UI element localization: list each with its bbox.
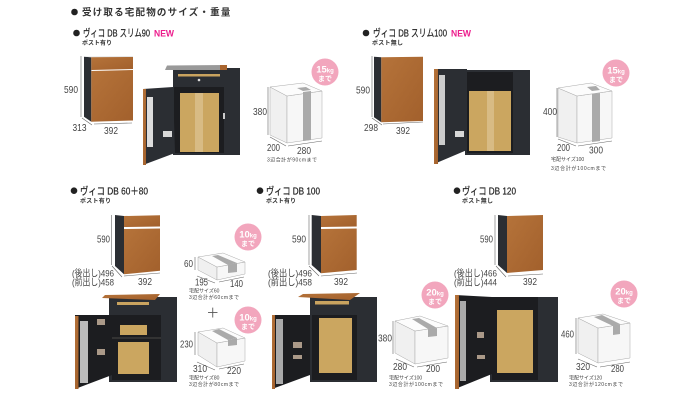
parcel box bbox=[253, 83, 322, 164]
model title: ヴィコ DB 100 bbox=[266, 184, 320, 198]
parcel box: 宅配サイズ100 bbox=[389, 374, 422, 382]
mailbox dimensions bbox=[454, 215, 543, 289]
mailbox dimensions: (後出し)496 bbox=[268, 268, 312, 280]
weight badge bbox=[234, 306, 262, 334]
closed mailbox bbox=[84, 56, 133, 122]
mailbox dimensions: 590 bbox=[64, 84, 78, 96]
parcel box: size 60: 195 bbox=[195, 276, 208, 288]
model title: NEW bbox=[154, 28, 174, 38]
weight badge: 20kg bbox=[426, 288, 444, 298]
mailbox dimensions: (後出し)466 bbox=[454, 268, 497, 280]
weight badge bbox=[610, 280, 638, 308]
weight badge: 10kg bbox=[239, 312, 257, 324]
mailbox dimensions: 590 bbox=[97, 234, 110, 246]
mailbox dimensions: 313 bbox=[72, 122, 87, 134]
weight badge: まで bbox=[318, 75, 332, 83]
model title: NEW bbox=[451, 28, 471, 38]
mailbox dimensions: (後出し)496 bbox=[72, 268, 114, 280]
model title: ポスト有り bbox=[82, 39, 112, 47]
parcel box: 320 bbox=[576, 361, 590, 373]
parcel box: 400 bbox=[543, 106, 557, 118]
weight badge bbox=[312, 58, 338, 86]
weight badge: まで bbox=[241, 240, 255, 248]
closed mailbox bbox=[312, 215, 357, 273]
model title: ヴィコ DB スリム90 bbox=[83, 26, 150, 40]
parcel box: size 60: 3辺合計が60cmまで bbox=[189, 294, 239, 301]
parcel box: 300 bbox=[589, 144, 603, 156]
parcel box: 280 bbox=[297, 145, 311, 157]
mailbox dimensions: 392 bbox=[138, 276, 152, 288]
parcel box: 280 bbox=[611, 363, 624, 375]
weight badge bbox=[234, 224, 262, 250]
parcel box: 3辺合計が100cmまで bbox=[389, 381, 443, 388]
model title: ポスト有り bbox=[80, 197, 111, 205]
parcel box: size 80: 宅配サイズ80 bbox=[189, 374, 220, 382]
open mailbox bbox=[272, 293, 377, 389]
mailbox dimensions: 590 bbox=[292, 234, 306, 246]
weight badge: 15kg bbox=[607, 66, 625, 76]
parcel box: 3辺合計が90cmまで bbox=[267, 156, 317, 164]
open mailbox bbox=[143, 65, 240, 165]
parcel box: 380 bbox=[378, 332, 392, 344]
panel: DB 60+80 bbox=[71, 184, 262, 389]
parcel box: 3辺合計が100cmまで bbox=[551, 165, 606, 172]
model title: ポスト無し bbox=[462, 197, 493, 205]
parcel box: 3辺合計が120cmまで bbox=[569, 381, 623, 388]
heading: 受け取る宅配物のサイズ・重量 bbox=[82, 6, 232, 18]
parcel box: size 80 bbox=[180, 328, 245, 388]
weight badge: 10kg bbox=[239, 230, 257, 240]
mailbox dimensions: 298 bbox=[364, 122, 378, 134]
parcel box: size 60: 140 bbox=[230, 278, 243, 290]
model title bbox=[71, 184, 148, 205]
mailbox dimensions: (前出し)458 bbox=[72, 277, 114, 289]
mailbox dimensions: 590 bbox=[480, 234, 493, 246]
parcel box: 380 bbox=[253, 106, 267, 118]
parcel box bbox=[543, 83, 612, 172]
parcel box: size 60 bbox=[184, 253, 245, 301]
panel: DB slim 100 bbox=[356, 26, 630, 172]
mailbox dimensions bbox=[268, 215, 357, 289]
open mailbox bbox=[75, 294, 177, 389]
parcel box: 280 bbox=[393, 361, 407, 373]
weight badge: まで bbox=[428, 298, 442, 306]
model title: ヴィコ DB 120 bbox=[462, 184, 516, 198]
mailbox dimensions bbox=[72, 215, 160, 289]
mailbox dimensions: 590 bbox=[356, 84, 370, 96]
mailbox dimensions: (前出し)444 bbox=[454, 277, 497, 289]
model title bbox=[257, 184, 320, 205]
parcel box: 200 bbox=[426, 363, 440, 375]
parcel box: 宅配サイズ120 bbox=[569, 374, 602, 382]
model title: ポスト有り bbox=[266, 197, 296, 205]
parcel box: size 60: 宅配サイズ60 bbox=[189, 288, 220, 294]
weight badge: まで bbox=[609, 76, 623, 84]
parcel box: size 60: 60 bbox=[184, 258, 193, 270]
closed mailbox bbox=[498, 215, 543, 273]
model title: ヴィコ DB 60＋80 bbox=[80, 184, 148, 198]
parcel box: 宅配サイズ100 bbox=[551, 156, 584, 163]
weight badge: 15kg bbox=[316, 64, 334, 76]
model title: ポスト無し bbox=[372, 39, 403, 47]
open mailbox bbox=[434, 69, 530, 164]
parcel box: 200 bbox=[267, 142, 280, 154]
weight badge: まで bbox=[617, 297, 631, 305]
panel: DB 120 bbox=[454, 184, 638, 389]
closed mailbox bbox=[115, 215, 160, 274]
parcel box: 460 bbox=[561, 328, 574, 340]
weight badge bbox=[602, 60, 630, 86]
model title: ヴィコ DB スリム100 bbox=[373, 26, 447, 40]
weight badge: まで bbox=[241, 323, 255, 331]
mailbox dimensions: 392 bbox=[104, 125, 118, 137]
parcel box: size 80: 310 bbox=[193, 363, 207, 375]
parcel box: size 80: 220 bbox=[227, 365, 241, 377]
panel: DB slim 90 bbox=[64, 26, 338, 165]
mailbox dimensions: (前出し)458 bbox=[268, 277, 312, 289]
weight badge: 20kg bbox=[615, 286, 633, 298]
parcel box bbox=[561, 314, 630, 388]
closed mailbox bbox=[374, 57, 423, 122]
panel: DB 100 bbox=[257, 184, 448, 389]
mailbox dimensions: 392 bbox=[334, 276, 348, 288]
weight badge bbox=[422, 282, 448, 308]
mailbox dimensions bbox=[356, 56, 423, 137]
parcel box: 200 bbox=[557, 142, 570, 154]
parcel box bbox=[378, 316, 448, 388]
mailbox dimensions bbox=[64, 56, 132, 137]
parcel box: size 80: 3辺合計が80cmまで bbox=[189, 381, 239, 388]
model title bbox=[454, 184, 516, 205]
open mailbox bbox=[455, 295, 558, 389]
mailbox dimensions: 392 bbox=[396, 125, 410, 137]
mailbox dimensions: 392 bbox=[523, 276, 537, 288]
plus sign: ＋ bbox=[206, 306, 219, 320]
model title bbox=[73, 26, 174, 47]
model title bbox=[363, 26, 471, 47]
parcel box: size 80: 230 bbox=[180, 338, 193, 350]
